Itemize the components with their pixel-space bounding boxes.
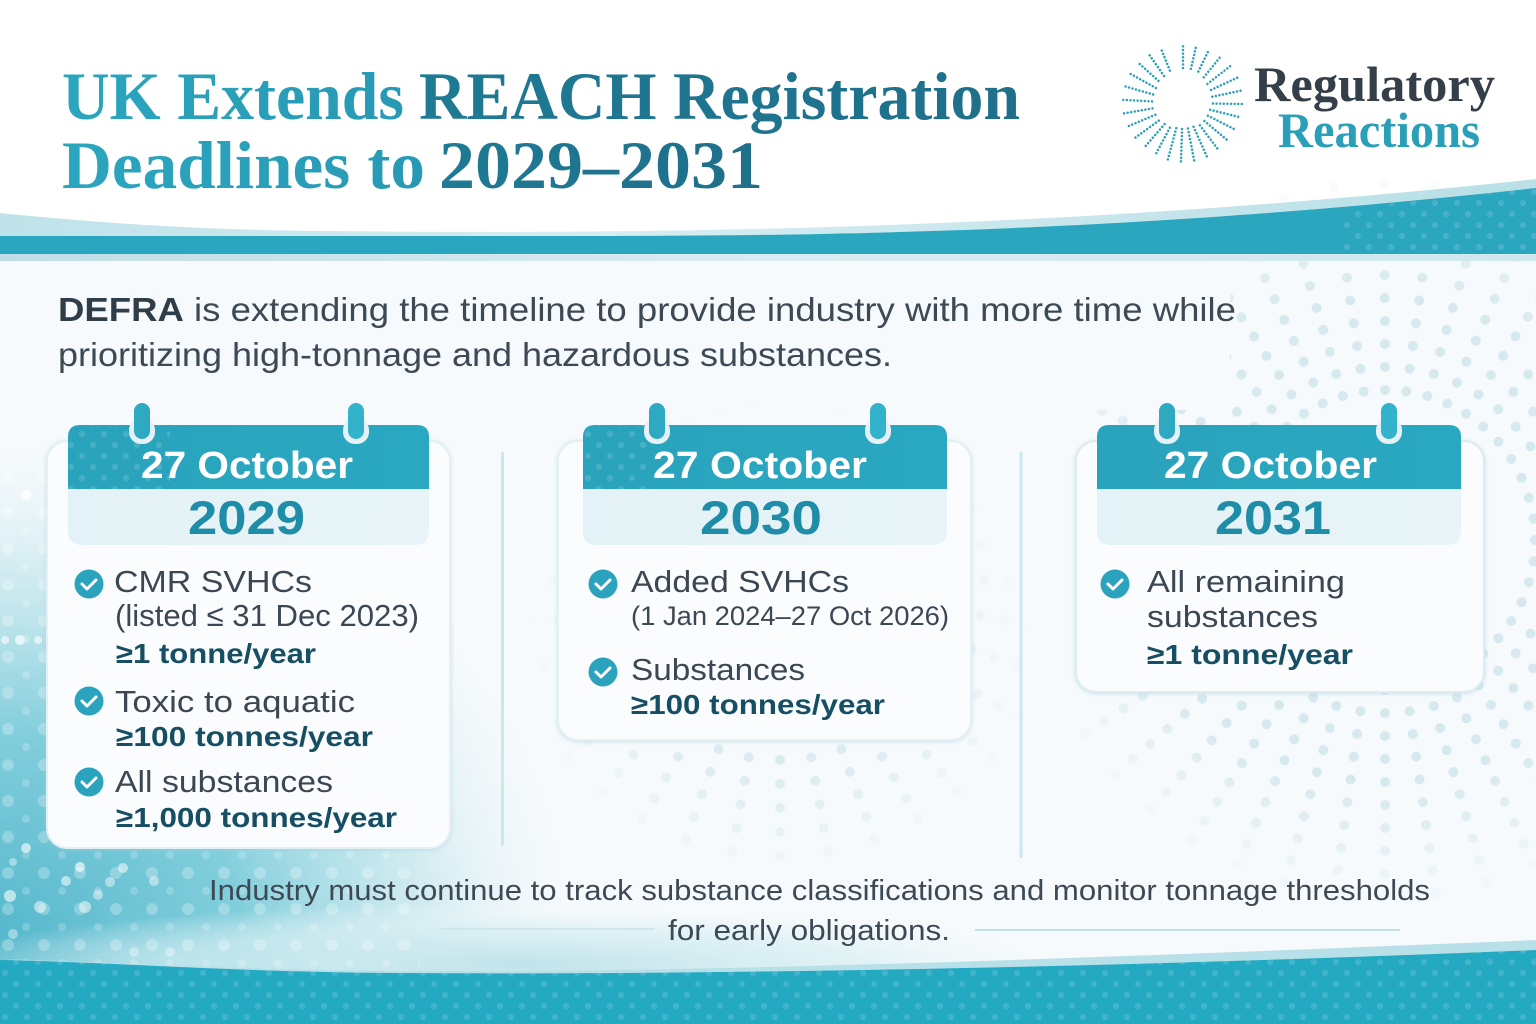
item: All substances: ≥1,000 tonnes/year [116, 802, 397, 833]
item: All remaining substances: ≥1 tonne/year [1147, 639, 1353, 670]
footer wave band [0, 940, 1536, 1024]
item: All remaining substances [1100, 564, 1353, 670]
calendar header [1097, 403, 1461, 545]
panel: 2031 deadline [1076, 403, 1484, 692]
title: UK Extends [62, 58, 404, 134]
card body [558, 441, 971, 740]
dot pattern: right [1097, 261, 1536, 879]
item: Substances [588, 652, 885, 720]
divider [1020, 452, 1022, 858]
calendar header: 2029 [188, 491, 305, 544]
intro text: prioritizing high-tonnage and hazardous substances. [58, 336, 892, 373]
header background [0, 0, 1536, 236]
title: 2029–2031 [439, 127, 763, 203]
calendar header: 2030 [700, 491, 822, 544]
card body [1076, 441, 1484, 692]
item: All substances [74, 764, 397, 833]
icon: sunburst [1123, 43, 1243, 163]
calendar header: 27 October [1164, 445, 1377, 487]
item: Toxic to aquatic: Toxic to aquatic [115, 684, 355, 719]
calendar header: 2031 [1215, 491, 1331, 544]
left teal glow [0, 420, 1100, 1024]
footer note: for early obligations. [668, 915, 950, 947]
dot pattern: centre [588, 576, 994, 861]
item: Substances: ≥100 tonnes/year [631, 689, 885, 720]
intro text [58, 291, 1236, 373]
item: CMR SVHCs [74, 564, 419, 669]
item: Toxic to aquatic: ≥100 tonnes/year [116, 721, 373, 752]
title [62, 58, 1020, 203]
card body [47, 441, 450, 848]
item: All substances: All substances [115, 764, 333, 799]
calendar header [68, 403, 429, 545]
panel: 2029 deadline [47, 403, 450, 848]
title: Deadlines to [62, 127, 425, 203]
item: All remaining substances: substances [1147, 599, 1318, 634]
logo [1123, 43, 1495, 163]
item: CMR SVHCs: (listed ≤ 31 Dec 2023) [115, 598, 419, 633]
item: CMR SVHCs: ≥1 tonne/year [116, 638, 316, 669]
divider [501, 452, 504, 846]
item: Added SVHCs [588, 564, 949, 631]
item: All remaining substances: All remaining [1147, 564, 1345, 599]
calendar header: 27 October [141, 445, 353, 487]
header wave band [0, 179, 1536, 261]
footer note: Industry must continue to track substance classifications and monitor tonnage thresholds [209, 875, 1430, 907]
item: Added SVHCs: (1 Jan 2024–27 Oct 2026) [631, 601, 949, 631]
item: Added SVHCs: Added SVHCs [631, 564, 849, 599]
logo wordmark: Regulatory: Regulatory [1254, 56, 1495, 112]
calendar header: 27 October [653, 445, 867, 487]
intro text: DEFRA is extending the timeline to provide industry with more time while [58, 291, 1236, 328]
logo wordmark: Reactions: Reactions [1278, 102, 1480, 158]
item: Substances: Substances [631, 652, 805, 687]
item: Toxic to aquatic [74, 684, 373, 752]
title: REACH Registration [419, 58, 1020, 134]
item: CMR SVHCs: CMR SVHCs [114, 564, 312, 599]
calendar header [583, 403, 947, 545]
panel: 2030 deadline [558, 403, 971, 740]
footer note [209, 875, 1430, 947]
